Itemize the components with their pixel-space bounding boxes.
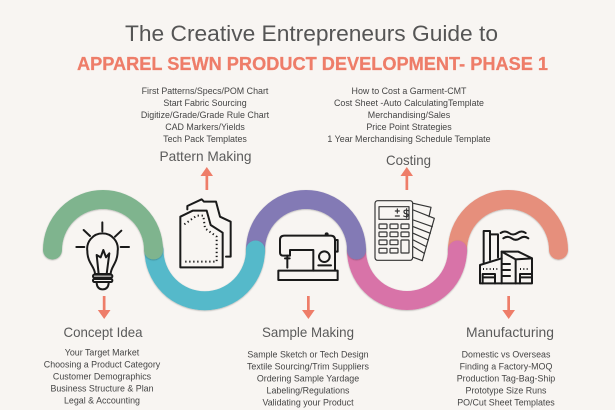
manufacturing list [457,350,555,408]
ribbon segment: concept idea [52,199,154,250]
pattern making list: Digitize/Grade/Grade Rule Chart [141,110,270,120]
concept idea list: Your Target Market [65,348,140,358]
icon: factory [480,231,532,283]
costing list [327,86,491,144]
wavy process ribbon [52,199,558,301]
concept idea list [44,348,161,406]
ribbon segment: manufacturing [458,199,558,250]
sample making list [247,350,370,408]
title: The Creative Entrepreneurs Guide to [125,21,498,46]
costing list: 1 Year Merchandising Schedule Template [327,134,491,144]
manufacturing list: Finding a Factory-MOQ [460,362,552,372]
costing list: Cost Sheet -Auto CalculatingTemplate [334,98,484,108]
manufacturing list: Domestic vs Overseas [462,350,551,360]
pattern making list: CAD Markers/Yields [165,122,245,132]
ribbon segment: sample making [256,199,356,250]
subtitle: APPAREL SEWN PRODUCT DEVELOPMENT- PHASE 1 [77,54,548,74]
manufacturing list: Production Tag-Bag-Ship [457,374,555,384]
sample making list: Sample Sketch or Tech Design [247,350,369,360]
arrow: down to manufacturing [502,296,515,319]
concept idea list: Choosing a Product Category [44,360,161,370]
costing list: Price Point Strategies [366,122,452,132]
heading: manufacturing: Manufacturing [466,324,554,340]
costing list: How to Cost a Garment-CMT [352,86,467,96]
concept idea list: Customer Demographics [53,372,152,382]
heading: costing: Costing [386,152,431,168]
ribbon segment: pattern making [154,250,256,301]
arrow: up to pattern making [200,167,213,190]
pattern making list: First Patterns/Specs/POM Chart [142,86,269,96]
arrow: down to concept idea [98,296,110,319]
icon: calculator with receipts [375,201,434,261]
costing list: Merchandising/Sales [368,110,451,120]
icon: light bulb [76,222,129,289]
icon: garment pattern pieces [180,199,231,267]
sample making list: Labeling/Regulations [267,386,350,396]
manufacturing list: PO/Cut Sheet Templates [457,398,555,408]
sample making list: Textile Sourcing/Trim Suppliers [247,362,370,372]
arrow: down to sample making [302,296,315,319]
pattern making list [141,86,270,144]
heading: sample making: Sample Making [262,324,354,340]
pattern making list: Tech Pack Templates [163,134,247,144]
ribbon segment: costing [356,250,458,300]
concept idea list: Business Structure & Plan [50,384,154,394]
pattern making list: Start Fabric Sourcing [163,98,247,108]
manufacturing list: Prototype Size Runs [466,386,547,396]
icon: sewing machine [278,233,338,280]
sample making list: Validating your Product [262,398,354,408]
sample making list: Ordering Sample Yardage [257,374,359,384]
concept idea list: Legal & Accounting [64,396,140,406]
arrow: up to costing [400,167,413,190]
heading: concept idea: Concept Idea [64,324,143,340]
heading: pattern making: Pattern Making [160,148,252,164]
